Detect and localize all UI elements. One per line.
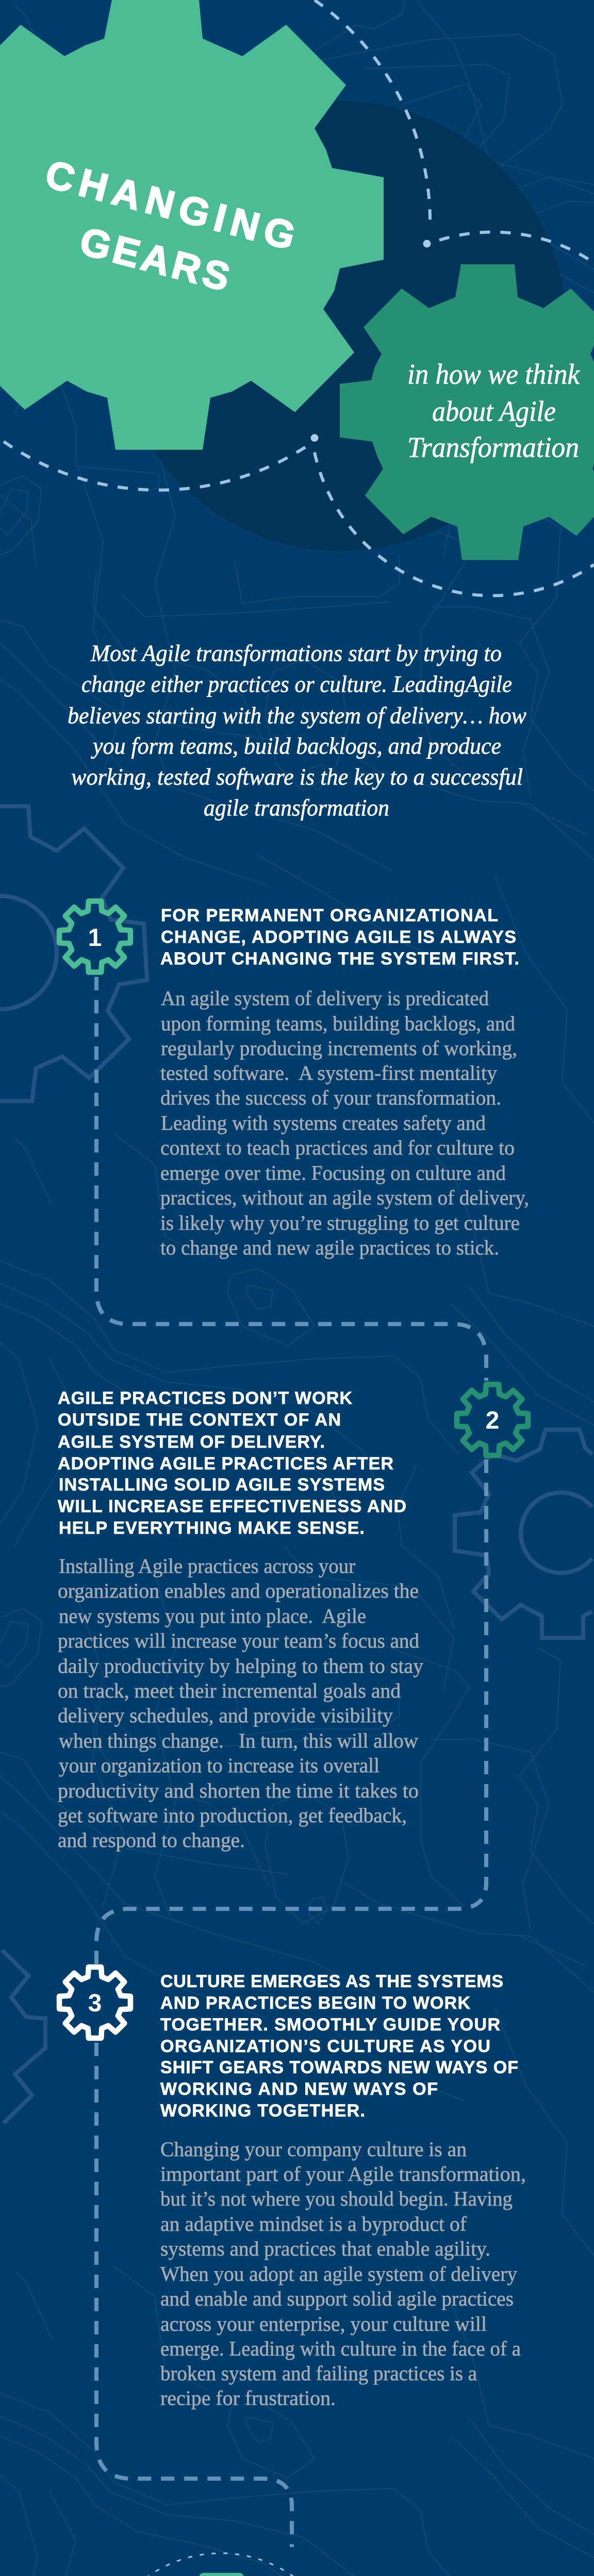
icon: step 3 gear: 3 xyxy=(88,1990,102,2017)
intro paragraph xyxy=(68,640,526,821)
hero: orbit dots xyxy=(310,240,431,442)
step 2 body text xyxy=(58,1554,423,1852)
hero: dark circle behind gears xyxy=(116,101,566,551)
step 1 heading: CHANGE, ADOPTING AGILE IS ALWAYS xyxy=(161,927,516,947)
step 1 body text: tested software. A system-first mentality xyxy=(160,1061,497,1084)
step 1 body text: upon forming teams, building backlogs, and xyxy=(161,1012,515,1035)
hero: small gear xyxy=(340,264,594,560)
step 2 body text: and respond to change. xyxy=(58,1828,245,1852)
step 3 heading: WORKING TOGETHER. xyxy=(160,2101,365,2121)
step 3 body text: important part of your Agile transformation, xyxy=(160,2162,526,2185)
step 2 body text: daily productivity by helping to them to stay xyxy=(58,1654,423,1677)
intro paragraph: agile transformation xyxy=(204,794,389,821)
step 2 heading: AGILE PRACTICES DON’T WORK xyxy=(58,1388,352,1408)
step 3 body text xyxy=(160,2138,526,2410)
step 3 heading: AND PRACTICES BEGIN TO WORK xyxy=(160,1993,470,2013)
step 2 body text: delivery schedules, and provide visibility xyxy=(58,1704,393,1727)
step 2 heading xyxy=(58,1388,406,1538)
intro paragraph: change either practices or culture. LeadingAgile xyxy=(81,671,512,697)
step 3 body text: and enable and support solid agile practices xyxy=(160,2287,514,2310)
step 2 heading: WILL INCREASE EFFECTIVENESS AND xyxy=(58,1497,406,1516)
step 2 body text: get software into production, get feedback, xyxy=(58,1804,407,1827)
subtitle: Transformation xyxy=(407,432,579,464)
step 2 body text: your organization to increase its overall xyxy=(59,1754,380,1777)
step 3 heading: TOGETHER. SMOOTHLY GUIDE YOUR xyxy=(160,2015,500,2035)
step 3 heading: SHIFT GEARS TOWARDS NEW WAYS OF xyxy=(160,2058,518,2077)
step 3 body text: systems and practices that enable agility. xyxy=(160,2237,490,2260)
step 1 heading: ABOUT CHANGING THE SYSTEM FIRST. xyxy=(160,949,519,969)
step 1 heading xyxy=(160,906,519,969)
step 3 heading: WORKING AND NEW WAYS OF xyxy=(160,2079,438,2099)
step 1 body text: to change and new agile practices to stick. xyxy=(160,1236,499,1259)
step 2 body text: when things change. In turn, this will allow xyxy=(59,1729,418,1752)
connector: step 2 to step 3 xyxy=(96,1460,486,1964)
step 3 body text: Changing your company culture is an xyxy=(160,2138,467,2161)
step 2 heading: INSTALLING SOLID AGILE SYSTEMS xyxy=(59,1475,385,1495)
step 3 heading: CULTURE EMERGES AS THE SYSTEMS xyxy=(160,1972,503,1991)
step 1 body text: is likely why you’re struggling to get culture xyxy=(160,1211,520,1234)
step 2 heading: HELP EVERYTHING MAKE SENSE. xyxy=(59,1518,365,1538)
step 2 body text: organization enables and operationalizes the xyxy=(58,1579,419,1602)
step 3 body text: but it’s not where you should begin. Having xyxy=(160,2187,513,2210)
icon: step 3 gear xyxy=(59,1967,130,2038)
step 2 heading: OUTSIDE THE CONTEXT OF AN xyxy=(58,1410,341,1430)
intro paragraph: you form teams, build backlogs, and produce xyxy=(91,733,501,759)
step 3 heading xyxy=(160,1972,518,2121)
step 1 body text: regularly producing increments of working, xyxy=(161,1037,517,1060)
icon: step 1 gear: 1 xyxy=(88,924,102,952)
hero: dashed orbit lines xyxy=(0,0,594,596)
step 2 body text: on track, meet their incremental goals and xyxy=(58,1679,401,1702)
title: Changing Gears: CHANGING xyxy=(41,152,300,259)
subtitle: about Agile xyxy=(432,396,556,428)
icon: step 1 gear xyxy=(59,901,130,972)
step 3 body text: When you adopt an agile system of delivery xyxy=(160,2262,517,2285)
step 1 body text: emerge over time. Focusing on culture and xyxy=(160,1161,506,1184)
intro paragraph: believes starting with the system of delivery… how xyxy=(68,702,526,728)
step 1 body text: practices, without an agile system of delivery, xyxy=(160,1186,529,1209)
intro paragraph: working, tested software is the key to a successful xyxy=(71,764,523,790)
icon: step 2 gear: 2 xyxy=(486,1407,499,1434)
connector: step 1 to step 2 xyxy=(96,977,486,1381)
step 1 heading: FOR PERMANENT ORGANIZATIONAL xyxy=(161,906,498,925)
step 3 body text: broken system and failing practices is a xyxy=(160,2362,477,2385)
step 3 body text: across your enterprise, your culture will xyxy=(160,2312,487,2335)
step 2 body text: practices will increase your team’s focus and xyxy=(58,1629,419,1652)
title: Changing Gears: GEARS xyxy=(75,219,234,300)
step 3 body text: emerge. Leading with culture in the face of a xyxy=(160,2337,521,2360)
connector: step 3 to gear trio xyxy=(96,2043,292,2547)
step 1 body text: An agile system of delivery is predicated xyxy=(161,987,489,1010)
subtitle xyxy=(407,359,580,464)
step 2 body text: productivity and shorten the time it takes to xyxy=(58,1779,419,1802)
step 2 body text: new systems you put into place. Agile xyxy=(59,1604,366,1628)
step 2 heading: ADOPTING AGILE PRACTICES AFTER xyxy=(58,1454,393,1473)
subtitle: in how we think xyxy=(407,359,580,391)
ghost gear outlines xyxy=(0,806,592,2123)
step 3 body text: recipe for frustration. xyxy=(160,2386,336,2410)
step 1 body text: Leading with systems creates safety and xyxy=(161,1111,486,1134)
step 2 body text: Installing Agile practices across your xyxy=(59,1554,355,1578)
step 2 heading: AGILE SYSTEM OF DELIVERY. xyxy=(58,1432,325,1452)
step 1 body text: context to teach practices and for culture to xyxy=(160,1136,515,1159)
intro paragraph: Most Agile transformations start by trying to xyxy=(90,640,502,666)
step 1 body text: drives the success of your transformation. xyxy=(160,1086,501,1109)
hero: large gear xyxy=(0,0,384,450)
gear trio: dotted orbits xyxy=(96,2553,511,2576)
step 3 heading: ORGANIZATION’S CULTURE AS YOU xyxy=(160,2037,490,2056)
icon: step 2 gear xyxy=(457,1384,528,1455)
step 1 body text xyxy=(160,987,529,1259)
step 3 body text: an adaptive mindset is a byproduct of xyxy=(160,2212,467,2235)
